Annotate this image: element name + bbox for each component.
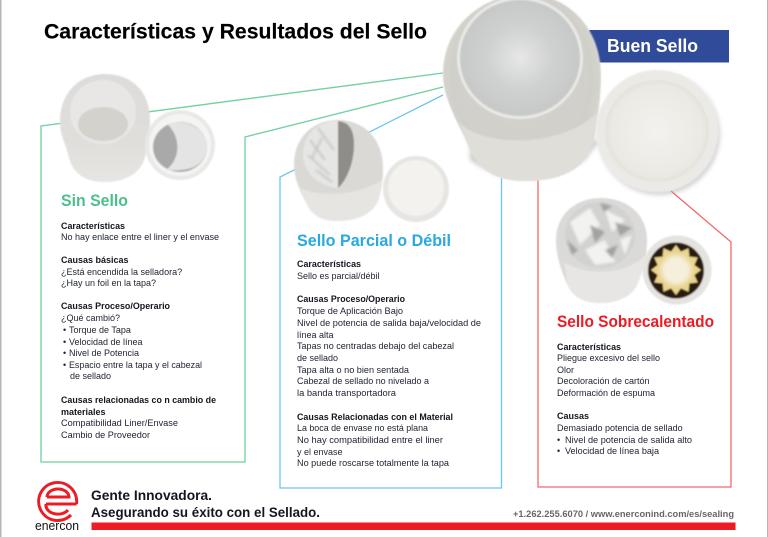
photo: sello sobrecalentado jar [556, 198, 647, 303]
panel text: sello parcial: Causas Relacionadas con el Material [297, 412, 453, 422]
panel text: sello parcial: Sello es parcial/débil [297, 271, 380, 281]
panel text: sello sobrecalentado: Causas [557, 411, 589, 421]
panel text: sello parcial: la banda transportadora [297, 388, 396, 398]
footer red bar [92, 522, 736, 530]
panel text: sin sello: • [63, 360, 66, 370]
label: buen sello [589, 30, 729, 62]
panel text: sin sello: Velocidad de línea [69, 337, 143, 347]
panel text: sello sobrecalentado: • [557, 435, 560, 445]
panel text: sin sello: Cambio de Proveedor [61, 430, 150, 440]
panel text: sin sello: Espacio entre la tapa y el cabezal [69, 360, 202, 370]
panel text: sin sello: Características [61, 221, 125, 231]
photo: sin sello lid [145, 110, 215, 180]
logo: enercon [35, 482, 79, 533]
panel text: sello parcial: Cabezal de sellado no nivelado a [297, 376, 429, 386]
panel text: sin sello: Causas relacionadas co n cambio de [61, 395, 216, 405]
panel text: sin sello: ¿Está encendida la selladora? [61, 267, 182, 277]
tagline: Gente Innovadora. [91, 488, 212, 503]
title: Características y Resultados del Sello [44, 20, 427, 44]
panel text: sin sello: ¿Hay un foil en la tapa? [61, 278, 156, 288]
photo: buen sello jar [443, 0, 601, 181]
photo: buen sello lid [596, 70, 720, 195]
panel text: sello parcial: Tapas no centradas debajo del cabezal [297, 341, 454, 351]
contact line: +1.262.255.6070 / www.enerconind.com/es/sealing [513, 509, 734, 520]
panel text: sin sello: ¿Qué cambió? [61, 313, 120, 323]
label: buen sello: Buen Sello [607, 36, 698, 56]
panel text: sello parcial: de sellado [297, 353, 338, 363]
heading: sello sobrecalentado: Sello Sobrecalentado [557, 313, 714, 331]
panel text: sello parcial [297, 232, 481, 468]
photo: sello parcial jar [294, 120, 383, 221]
panel text: sin sello: materiales [61, 407, 106, 417]
panel text: sin sello: Causas Proceso/Operario [61, 301, 170, 311]
panel text: sin sello: Causas básicas [61, 255, 129, 265]
panel text: sello parcial: Nivel de potencia de salida baja/velocidad de [297, 318, 481, 328]
photo: sello sobrecalentado lid [642, 236, 712, 304]
panel text: sello parcial: Tapa alta o no bien sentada [297, 365, 409, 375]
panel text: sello parcial: No hay compatibilidad entre el liner [297, 435, 443, 445]
panel outline: sin sello [41, 73, 443, 462]
panel text: sello sobrecalentado: Nivel de potencia de salida alto [565, 435, 692, 445]
panel text: sello sobrecalentado: Velocidad de línea baja [565, 446, 659, 456]
panel text: sello sobrecalentado: Demasiado potencia de sellado [557, 423, 683, 433]
panel text: sello parcial: La boca de envase no está plana [297, 423, 428, 433]
panel text: sello parcial: Características [297, 259, 361, 269]
panel text: sello sobrecalentado: Características [557, 342, 621, 352]
panel text: sello sobrecalentado: Decoloración de cartón [557, 376, 650, 386]
panel text: sello sobrecalentado: Pliegue excesivo del sello [557, 353, 660, 363]
heading: sin sello: Sin Sello [61, 192, 128, 210]
panel text: sin sello: de sellado [70, 371, 111, 381]
panel text: sin sello: • [63, 325, 66, 335]
tagline: Asegurando su éxito con el Sellado. [91, 505, 320, 520]
photo: sin sello jar [60, 74, 150, 182]
panel text: sello parcial: línea alta [297, 330, 334, 340]
panel text: sin sello: Compatibilidad Liner/Envase [61, 418, 178, 428]
panel text: sello sobrecalentado: Deformación de espuma [557, 388, 655, 398]
panel text: sello parcial: No puede roscarse totalmente la tapa [297, 458, 449, 468]
logo: enercon: enercon [35, 518, 79, 533]
tagline [91, 488, 320, 520]
panel text: sin sello: • [63, 337, 66, 347]
panel outline: sello parcial [280, 95, 502, 488]
panel text: sello sobrecalentado: Olor [557, 365, 574, 375]
panel text: sin sello: Torque de Tapa [69, 325, 131, 335]
panel text: sello parcial: Torque de Aplicación Bajo [297, 306, 403, 316]
panel text: sello parcial: y el envase [297, 447, 343, 457]
panel text: sello parcial: Causas Proceso/Operario [297, 294, 405, 304]
panel text: sin sello: • [63, 348, 66, 358]
heading: sello parcial: Sello Parcial o Débil [297, 232, 451, 250]
panel text: sin sello [61, 192, 219, 440]
photo: sello parcial lid [383, 156, 449, 222]
panel text: sello sobrecalentado: • [557, 446, 560, 456]
panel text: sello sobrecalentado [557, 313, 714, 456]
panel text: sin sello: Nivel de Potencia [69, 348, 139, 358]
panel text: sin sello: No hay enlace entre el liner y el envase [61, 232, 219, 242]
panel outline: sello sobrecalentado [538, 180, 731, 487]
